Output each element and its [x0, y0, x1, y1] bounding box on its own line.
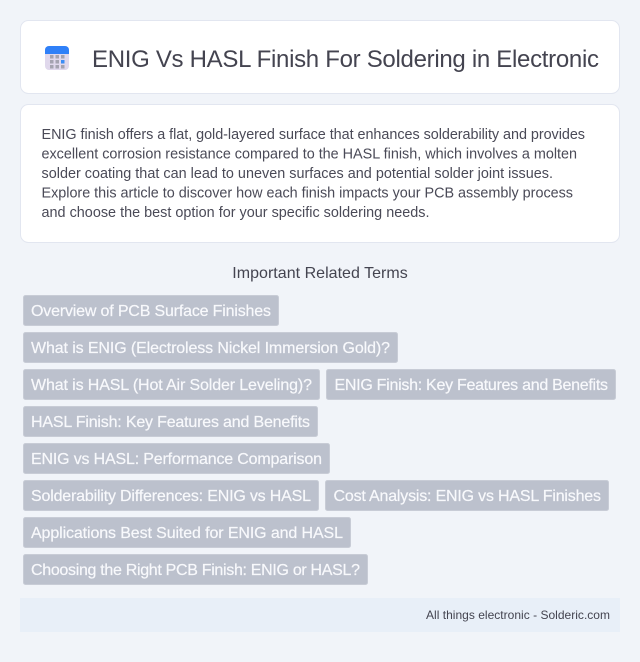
- footer: [20, 598, 620, 632]
- tag list: [24, 296, 616, 584]
- tag: HASL Finish: Key Features and Benefits: [31, 414, 310, 431]
- tag: Solderability Differences: ENIG vs HASL: [31, 488, 311, 505]
- intro text: and choose the best option for your specific soldering needs.: [42, 205, 430, 221]
- tag: [24, 406, 318, 436]
- tag: [24, 518, 350, 548]
- title: ENIG Vs HASL Finish For Soldering in Electronic: [92, 46, 599, 73]
- tag: Choosing the Right PCB Finish: ENIG or HASL?: [31, 562, 360, 579]
- tag: [24, 332, 398, 362]
- footer: All things electronic - Solderic.com: [426, 608, 610, 622]
- tag: [24, 480, 318, 510]
- tag: [326, 480, 608, 510]
- tag: ENIG vs HASL: Performance Comparison: [31, 451, 322, 468]
- tag: ENIG Finish: Key Features and Benefits: [334, 377, 608, 394]
- intro text: ENIG finish offers a flat, gold-layered surface that enhances solderability and provides: [42, 127, 585, 143]
- tag: What is HASL (Hot Air Solder Leveling)?: [31, 377, 312, 394]
- tag: [24, 296, 278, 326]
- tag: [24, 554, 368, 584]
- tag: [24, 370, 320, 400]
- icon: calendar: [45, 46, 69, 70]
- panel: title card: [20, 20, 620, 94]
- tag: Applications Best Suited for ENIG and HASL: [31, 525, 343, 542]
- tag: [24, 444, 330, 474]
- tag: What is ENIG (Electroless Nickel Immersion Gold)?: [31, 340, 390, 357]
- intro text: Explore this article to discover how each finish impacts your PCB assembly process: [42, 186, 573, 202]
- tag: [326, 370, 616, 400]
- panel: intro card: [20, 104, 620, 242]
- tag: Cost Analysis: ENIG vs HASL Finishes: [334, 488, 601, 505]
- tag: Overview of PCB Surface Finishes: [31, 303, 271, 320]
- intro text: [42, 127, 585, 221]
- intro text: excellent corrosion resistance compared to the HASL finish, which involves a molten: [42, 146, 577, 162]
- heading: related terms: Important Related Terms: [232, 265, 408, 282]
- intro text: solder coating that can lead to uneven surfaces and potential solder joint issues.: [42, 166, 553, 182]
